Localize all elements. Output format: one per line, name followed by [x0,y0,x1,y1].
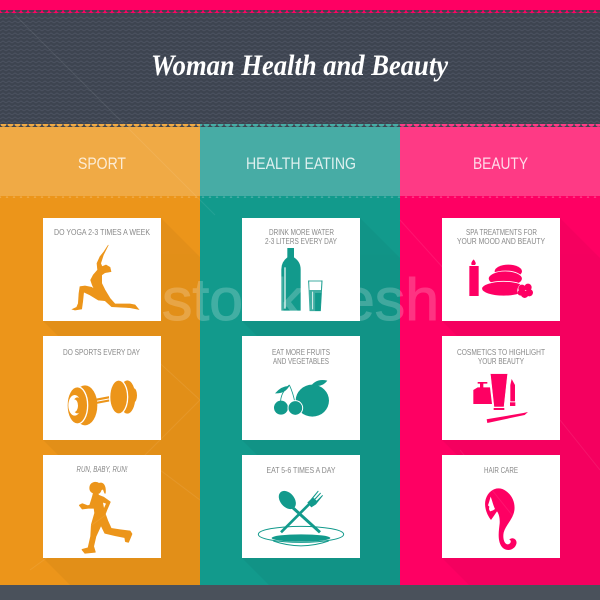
card: water [242,218,360,321]
label: cosmetics: COSMETICS TO HIGHLIGHT [457,348,545,357]
card: fruits: AND VEGETABLES [273,357,329,366]
label: run: RUN, BABY, RUN! [76,465,128,474]
card: spa [442,218,560,321]
label: sports: DO SPORTS EVERY DAY [63,348,141,357]
label: hair: HAIR CARE [484,466,518,475]
card: cosmetics [442,336,560,440]
label: fruits: EAT MORE FRUITS [272,348,330,357]
icon: bottle and glass [281,248,322,311]
column: sport [0,124,200,585]
card: hair [442,455,560,558]
label: yoga: DO YOGA 2-3 TIMES A WEEK [54,228,151,237]
icon: dumbbell [67,380,137,425]
icon: cherries and apple [274,380,329,417]
icon: candle, stones and flower [469,259,534,299]
card: meals [242,455,360,558]
column: beauty [400,124,600,585]
footer band [0,585,600,600]
label: water: DRINK MORE WATER [269,228,334,237]
icon: cosmetics set [473,374,528,423]
heading: sport: SPORT [78,154,126,173]
label: meals: EAT 5-6 TIMES A DAY [266,466,336,475]
card: sports [43,336,161,440]
card: fruits [242,336,360,440]
label: spa: SPA TREATMENTS FOR [466,228,537,237]
column: health eating [200,124,400,585]
card: yoga [43,218,161,321]
icon: woman with long hair [485,488,517,550]
card: run [43,455,161,558]
watermark text: stockfresh [162,267,439,333]
heading: health eating: HEALTH EATING [246,154,356,173]
icon: plate with spoon and fork [258,488,344,546]
title: Woman Health and Beauty [151,49,449,82]
heading: beauty: BEAUTY [473,154,528,173]
card: spa: YOUR MOOD AND BEAUTY [457,237,546,246]
top pink strip [0,0,600,13]
dark title banner [0,10,600,126]
card: cosmetics: YOUR BEAUTY [478,357,525,366]
card: water: 2-3 LITERS EVERY DAY [265,237,338,246]
icon: runner [80,483,132,553]
icon: yoga pose [72,245,139,310]
